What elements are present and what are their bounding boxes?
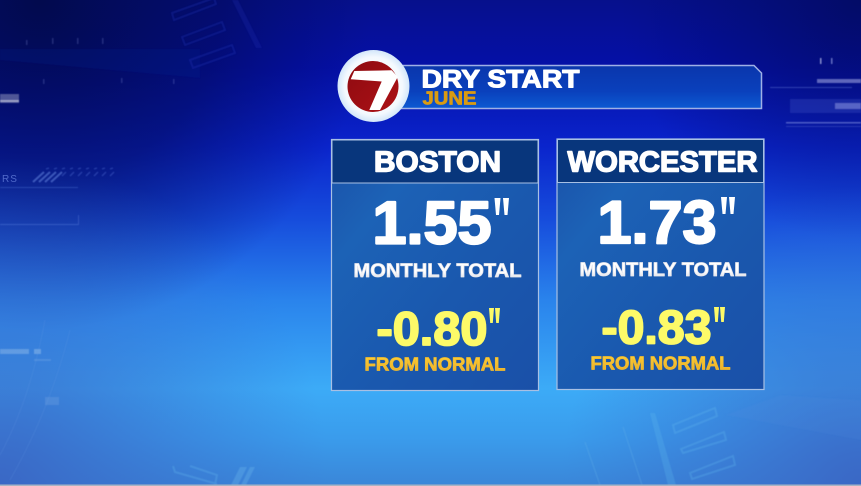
faint label: RS: RS bbox=[2, 174, 18, 185]
icon: channel 7 logo bbox=[338, 50, 410, 122]
monthly total value: 1.55 bbox=[372, 190, 492, 256]
header: Boston bbox=[332, 140, 538, 183]
subheading: JUNE bbox=[422, 88, 476, 108]
from normal label: FROM NORMAL bbox=[590, 352, 730, 374]
monthly total label: MONTHLY TOTAL bbox=[580, 259, 747, 281]
monthly total label: MONTHLY TOTAL bbox=[354, 260, 522, 282]
header: Boston: BOSTON bbox=[374, 146, 501, 178]
title banner bbox=[338, 50, 762, 122]
header: Worcester bbox=[558, 140, 764, 182]
monthly total value: 1.73 bbox=[598, 189, 716, 256]
header: Worcester: WORCESTER bbox=[568, 146, 758, 178]
departure value: -0.83 bbox=[602, 300, 712, 354]
from normal label: FROM NORMAL bbox=[364, 354, 506, 374]
departure value: -0.80 bbox=[376, 302, 488, 355]
heading: DRY START bbox=[422, 66, 580, 94]
panel: Worcester bbox=[557, 139, 764, 390]
panel: Boston bbox=[332, 140, 538, 390]
